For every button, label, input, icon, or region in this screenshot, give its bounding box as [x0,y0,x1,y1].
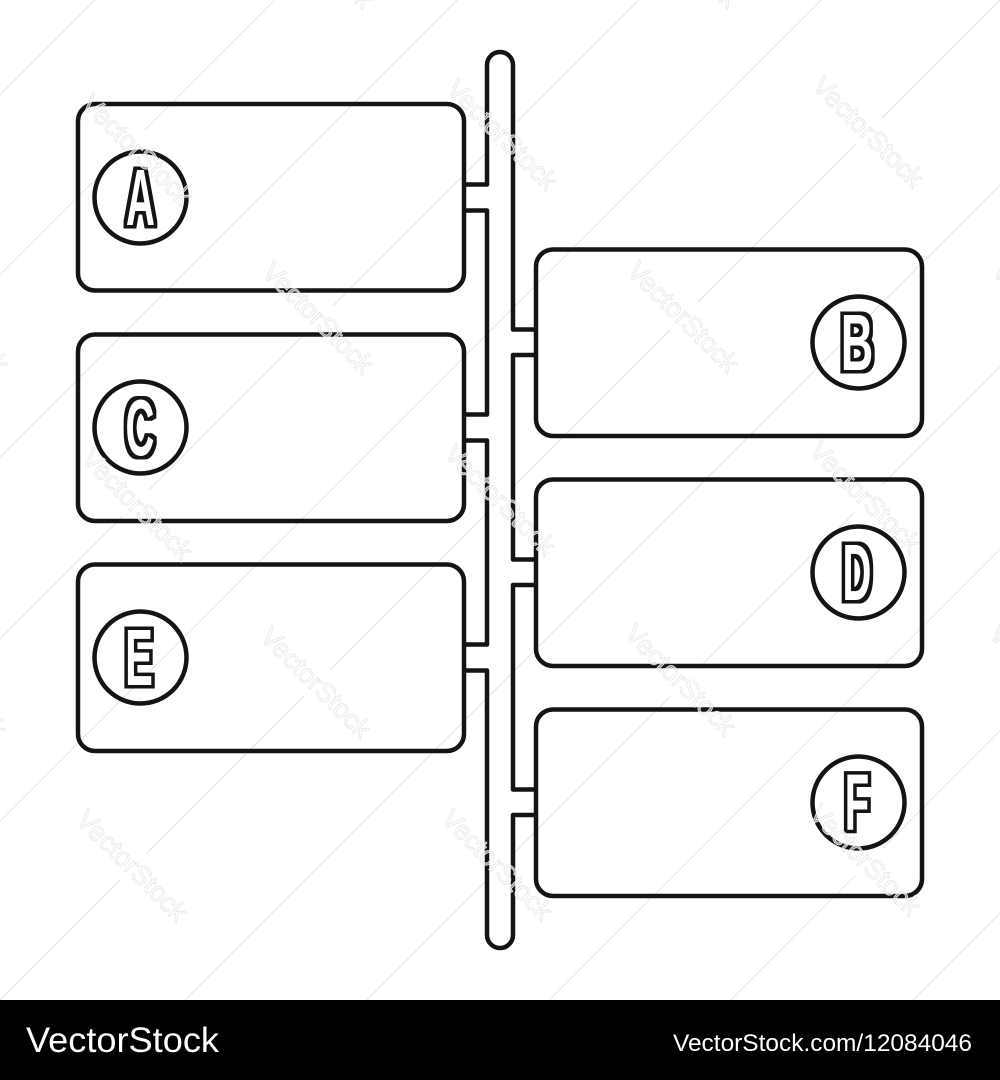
icon: circle D: D [843,529,871,618]
text: VectorStock [621,255,745,379]
text: VectorStock [440,73,564,197]
icon: circle B [812,296,904,388]
panel: C [78,334,464,521]
central spine with connectors [465,52,535,948]
text: VectorStock [70,804,194,928]
footer image id: VectorStock.com/12084046 [673,1030,972,1057]
text: VectorStock [806,70,930,194]
text: VectorStock [254,621,378,745]
panel: B [536,250,922,436]
text: VectorStock [803,798,927,922]
panel: D [536,480,922,666]
icon: circle E: E [125,612,153,703]
panel: A [78,104,464,290]
text: VectorStock [75,88,199,212]
icon: circle F [812,756,904,848]
footer brand: VectorStock [26,1021,220,1060]
text: VectorStock [618,618,742,742]
panel: E [78,564,464,751]
text: VectorStock [803,435,927,559]
icon: circle A: A [126,154,155,243]
icon: circle F: F [845,759,869,847]
text: VectorStock [256,256,380,380]
panel: F [536,710,922,896]
icon: circle E [94,612,186,704]
text: VectorStock [435,803,559,927]
icon: circle B: B [841,297,873,387]
icon: circle A [94,152,186,244]
icon: circle C [94,382,186,474]
text: VectorStock [75,443,199,567]
footer bar [0,1000,1000,1080]
icon: circle C: C [126,384,154,473]
text: VectorStock [438,438,562,562]
icon: circle D [812,526,904,618]
